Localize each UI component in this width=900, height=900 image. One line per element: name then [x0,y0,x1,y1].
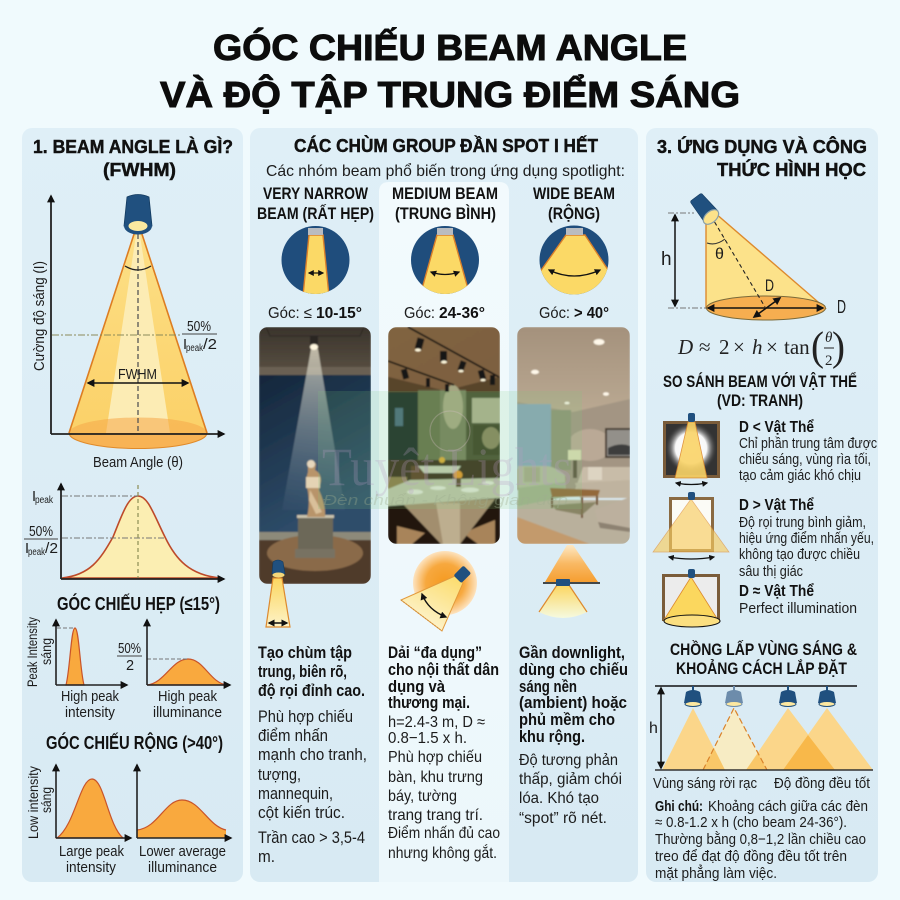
chart: wide large peak intensity: sáng [38,787,54,813]
text: narrow beam description: m. [258,848,275,866]
angle label: wide: Góc: [539,305,570,322]
chart: intensity bell curve: /2 [45,541,58,557]
note: spacing: Thường bằng 0,8−1,2 lần chiều cao [655,831,866,848]
angle label: narrow: Góc: ≤ [268,305,312,322]
text: wide beam description: Độ tương phản [519,752,618,769]
text: medium beam description: h=2.4-3 m, D ≈ [388,714,485,731]
chart: narrow high peak illuminance: High peak [158,689,218,705]
diagram: geometry of beam: θ [715,246,724,263]
heading: beam angle: (FWHM) [103,159,176,180]
text: D larger than object: không tạo được chiều [739,546,860,563]
text: narrow beam description: trung, biên rõ, [258,663,347,681]
angle label: narrow [268,305,362,322]
subtitle: beam groups: Các nhóm beam phổ biến trong ứng dụng spotlight: [266,162,625,180]
text: D smaller than object: tạo cảm giác khó chịu [739,467,861,484]
panel: beam groups [250,128,638,882]
photo: living room with downlights [517,327,630,544]
text: D equal to object: D ≈ Vật Thể [739,582,814,600]
column heading: medium: MEDIUM BEAM [392,185,498,203]
title: VÀ ĐỘ TẬP TRUNG ĐIỂM SÁNG [160,73,740,115]
heading: overlap and spacing [670,640,857,678]
labels: overlap diagram [653,775,871,792]
formula: beam diameter: D [677,335,693,359]
icon: narrow beam circle [282,226,350,296]
watermark: Tuyệt Lights [322,437,572,497]
chart: wide large peak intensity: Large peak [59,844,125,860]
chart: intensity bell curve: I [25,541,29,557]
heading: overlap and spacing: CHỒNG LẤP VÙNG SÁNG & [670,640,857,659]
text: medium beam description: cho nội thất dân [388,661,499,679]
column heading: medium [392,185,498,223]
text: wide beam description: phủ mềm cho [519,711,615,729]
chart: wide lower average illuminance [137,765,231,876]
chart: narrow high peak intensity: High peak [61,689,120,705]
chart: narrow high peak illuminance: 2 [126,658,134,674]
text: wide beam description: thấp, giảm chói [519,771,622,788]
note: spacing: ≈ 0.8-1.2 x h (cho beam 24-36°). [655,814,847,831]
chart: narrow high peak illuminance [117,620,230,721]
text: narrow beam description [258,644,367,866]
formula: beam diameter: ( [811,323,824,369]
column heading: very narrow: BEAM (RẤT HẸP) [257,204,374,223]
icon: medium beam tilted spotlight [401,551,477,631]
angle label: medium: Góc: [404,305,435,322]
chart: narrow high peak intensity: intensity [65,705,116,721]
labels: overlap diagram: Độ đồng đều tốt [774,775,871,792]
text: wide beam description [519,644,628,827]
icon: picture D smaller than object [663,413,720,484]
icon: spotlight lamp [124,194,152,234]
heading: wide beam: GÓC CHIẾU RỘNG (>40°) [46,732,223,753]
chart: wide lower average illuminance: Lower average [139,844,226,860]
text: wide beam description: dùng cho chiếu [519,661,628,679]
text: D equal to object [739,582,857,617]
note: spacing: mặt phẳng làm việc. [655,864,777,882]
chart: intensity bell curve: peak [28,547,46,558]
column heading: very narrow [257,185,374,223]
photo: statue under narrow spotlight [259,327,371,584]
chart: light cone FWHM: FWHM [118,367,157,383]
chart: wide large peak intensity: intensity [66,860,117,876]
chart: light cone FWHM: Cường độ sáng (I) [31,261,48,371]
angle label: wide [539,305,609,322]
chart: light cone FWHM: /2 [203,337,217,353]
photo: restaurant with track lights [388,327,500,544]
angle label: medium: 24-36° [439,305,485,322]
panel: beam angle definition [22,128,243,882]
text: D larger than object: D > Vật Thể [739,496,814,514]
text: D larger than object [739,496,874,580]
text: wide beam description: sáng nền [519,678,577,696]
text: medium beam description: báy, tường [388,788,457,805]
labels: overlap diagram: Vùng sáng rời rạc [653,775,757,792]
text: medium beam description: dụng và [388,678,446,696]
title [160,26,740,115]
chart: wide lower average illuminance: illuminance [148,860,217,876]
icon: medium beam circle [411,226,479,296]
formula: beam diameter: 2 [719,335,730,359]
note: spacing: treo để đạt độ đồng đều tốt trên [655,848,847,865]
text: narrow beam description: độ rọi đỉnh cao. [258,682,365,700]
heading: application [657,136,867,180]
text: wide beam description: lóa. Khó tạo [519,790,599,807]
text: narrow beam description: Tạo chùm tập [258,644,352,662]
column heading: wide: (RỘNG) [548,204,600,223]
formula: beam diameter: θ [825,330,833,346]
column heading: wide [533,185,615,223]
heading: narrow beam: GÓC CHIẾU HẸP (≤15°) [57,593,220,614]
note: spacing: Ghi chú: [655,799,703,815]
diagram: geometry of beam: D [837,297,846,317]
chart: narrow high peak intensity: sáng [38,638,54,665]
heading: overlap and spacing: KHOẢNG CÁCH LẮP ĐẶT [676,659,847,678]
icon: wide beam downlight [539,545,600,618]
chart: light cone FWHM [31,196,224,471]
formula: beam diameter [677,323,845,369]
column heading: wide: WIDE BEAM [533,185,615,203]
text: wide beam description: Gần downlight, [519,644,625,662]
heading: application: THỨC HÌNH HỌC [717,159,866,180]
chart: light cone FWHM: I [183,337,187,353]
text: narrow beam description: điểm nhấn [258,727,328,745]
title: GÓC CHIẾU BEAM ANGLE [213,26,687,68]
chart: narrow high peak illuminance: 50% [118,641,141,657]
formula: beam diameter: × [733,335,745,359]
icon: narrow beam spotlight below photo [266,560,290,627]
chart: light cone FWHM: peak [186,343,204,354]
angle label: wide: > 40° [574,305,609,322]
text: wide beam description: (ambient) hoặc [519,694,627,712]
text: narrow beam description: cột kiến trúc. [258,804,345,822]
text: wide beam description: “spot” rõ nét. [519,810,607,827]
formula: beam diameter: ≈ [699,335,711,359]
text: narrow beam description: Trần cao > 3,5-4 [258,829,365,847]
text: medium beam description: bàn, khu trưng [388,769,483,786]
chart: light cone FWHM: 50% [187,319,211,335]
text: medium beam description: trang trang trí. [388,807,483,824]
text: narrow beam description: mạnh cho tranh, [258,746,367,764]
formula: beam diameter: tan [784,335,810,359]
icon: picture D larger than object [653,492,729,559]
panel: application and geometry [646,128,878,882]
formula: beam diameter: h [752,335,762,359]
text: D larger than object: Độ rọi trung bình giảm, [739,514,866,531]
chart: light cone FWHM: Beam Angle (θ) [93,454,183,471]
heading: compare beam with object [663,372,857,410]
watermark [318,391,582,509]
heading: compare beam with object: SO SÁNH BEAM VỚI VẬT THỂ [663,372,857,391]
formula: beam diameter: × [766,335,778,359]
text: medium beam description: Điểm nhấn đủ cao [388,824,500,842]
note: spacing: Khoảng cách giữa các đèn [708,798,868,815]
heading: compare beam with object: (VD: TRANH) [717,392,803,410]
text: medium beam description: Phù hợp chiếu [388,749,482,766]
diagram: geometry of beam [661,194,846,320]
chart: intensity bell curve: I [32,489,36,505]
text: D equal to object: Perfect illumination [739,600,857,617]
text: D smaller than object: chiếu sáng, vùng rìa tối, [739,451,871,468]
text: D smaller than object: D < Vật Thể [739,418,814,436]
angle label: medium [404,305,485,322]
chart: narrow high peak intensity: Peak Intensity [24,617,40,687]
chart: narrow high peak intensity [24,617,127,721]
text: D larger than object: sâu thị giác [739,563,803,580]
heading: beam groups: CÁC CHÙM GROUP ĐẦN SPOT I HẾT [294,135,599,156]
column heading: very narrow: VERY NARROW [263,185,368,203]
chart: intensity bell curve [24,484,224,579]
text: narrow beam description: tượng, [258,766,301,784]
chart: wide large peak intensity [25,765,131,876]
diagram: geometry of beam: h [661,249,672,270]
text: medium beam description: thương mại. [388,694,470,712]
heading: application: 3. ỨNG DỤNG VÀ CÔNG [657,136,867,157]
diagram: overlapping beams: h [649,720,658,737]
text: medium beam description: Dải “đa dụng” [388,644,482,662]
text: wide beam description: khu rộng. [519,728,585,746]
column heading: medium: (TRUNG BÌNH) [395,204,496,223]
diagram: geometry of beam: D [765,276,774,295]
formula: beam diameter: 2 [825,353,832,369]
chart: intensity bell curve: 50% [29,524,53,540]
text: narrow beam description: mannequin, [258,785,333,803]
icon: picture D equal to object [662,569,720,627]
watermark: Đèn chuẩn - Không gian đẹp [323,492,568,509]
text: medium beam description: 0.8−1.5 x h. [388,730,467,747]
heading: beam angle [33,136,233,180]
chart: wide large peak intensity: Low intensity [25,766,41,839]
text: medium beam description [388,644,500,862]
chart: narrow high peak illuminance: illuminance [153,705,222,721]
chart: intensity bell curve: peak [35,495,54,506]
text: medium beam description: nhưng không gắt. [388,843,497,862]
note: spacing [655,798,868,882]
diagram: overlapping beams [649,686,873,770]
icon: wide beam circle [540,226,608,294]
text: D smaller than object [739,418,877,484]
heading: beam angle: 1. BEAM ANGLE LÀ GÌ? [33,136,233,157]
text: narrow beam description: Phù hợp chiếu [258,708,353,726]
formula: beam diameter: ) [832,323,845,369]
angle label: narrow: 10-15° [316,305,362,322]
